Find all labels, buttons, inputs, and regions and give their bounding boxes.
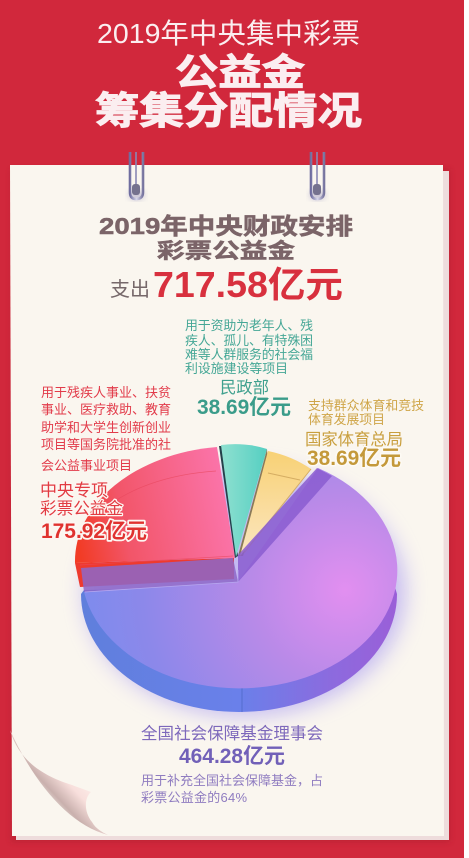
heading: panel headline: 717.58亿元 <box>153 264 343 305</box>
text block: central lottery description: 助学和大学生创新创业 <box>41 420 171 435</box>
label: central lottery amount <box>40 481 147 543</box>
text block: social security description: 用于补充全国社会保障基金，占 <box>141 773 323 788</box>
panel: paper sheet <box>10 165 450 842</box>
label: sports amount: 38.69亿元 <box>307 447 401 470</box>
text block: central lottery description: 会公益事业项目 <box>41 458 132 473</box>
slice: central lottery red <box>75 447 235 587</box>
label: civil affairs amount: 民政部 <box>220 379 269 397</box>
heading: panel headline: 彩票公益金 <box>157 239 295 263</box>
chart: 3D pie <box>75 444 405 716</box>
text block: sports description <box>308 398 424 427</box>
slice side: purple base <box>81 584 397 712</box>
label: sports amount: 国家体育总局 <box>305 431 403 449</box>
label: sports amount <box>305 431 403 470</box>
label: central lottery amount: 175.92亿元 <box>41 520 147 543</box>
text block: sports description: 体育发展项目 <box>308 412 385 427</box>
label: social security amount <box>141 724 323 768</box>
icon: right binder clip <box>310 152 326 200</box>
slice: civil affairs teal <box>219 444 267 558</box>
text block: sports description: 支持群众体育和竞技 <box>308 398 424 413</box>
heading: panel headline: 支出 <box>110 278 150 301</box>
slice: social security purple <box>81 468 397 688</box>
pie glow <box>85 468 405 716</box>
text block: civil affairs description: 用于资助为老年人、残 <box>185 318 313 333</box>
label: civil affairs amount <box>197 379 291 419</box>
text block: central lottery description: 项目等国务院批准的社 <box>41 437 171 452</box>
title: 2019年中央集中彩票 <box>97 18 360 49</box>
text block: social security description <box>141 773 323 805</box>
text block: central lottery description <box>41 385 171 473</box>
text block: civil affairs description: 利设施建设等项目 <box>185 361 288 376</box>
title: 公益金 <box>175 52 305 93</box>
text block: central lottery description: 事业、医疗救助、教育 <box>41 402 171 417</box>
text block: civil affairs description <box>185 318 313 376</box>
label: civil affairs amount: 38.69亿元 <box>197 396 291 419</box>
icon: left binder clip <box>128 152 144 200</box>
label: social security amount: 464.28亿元 <box>179 745 285 768</box>
heading: panel headline: 2019年中央财政安排 <box>99 213 353 239</box>
label: central lottery amount: 中央专项 <box>40 481 108 500</box>
title <box>95 18 362 133</box>
text block: civil affairs description: 疾人、孤儿、有特殊困 <box>185 333 313 348</box>
text block: central lottery description: 用于残疾人事业、扶贫 <box>41 385 171 400</box>
label: social security amount: 全国社会保障基金理事会 <box>141 724 323 743</box>
label: central lottery amount: 彩票公益金 <box>40 499 123 518</box>
slice: sports yellow <box>238 449 311 556</box>
text block: social security description: 彩票公益金的64% <box>141 790 247 805</box>
icon: page curl <box>10 730 108 835</box>
title: 筹集分配情况 <box>95 91 362 133</box>
text block: civil affairs description: 难等人群服务的社会福 <box>185 347 313 362</box>
heading: panel headline <box>99 213 353 305</box>
